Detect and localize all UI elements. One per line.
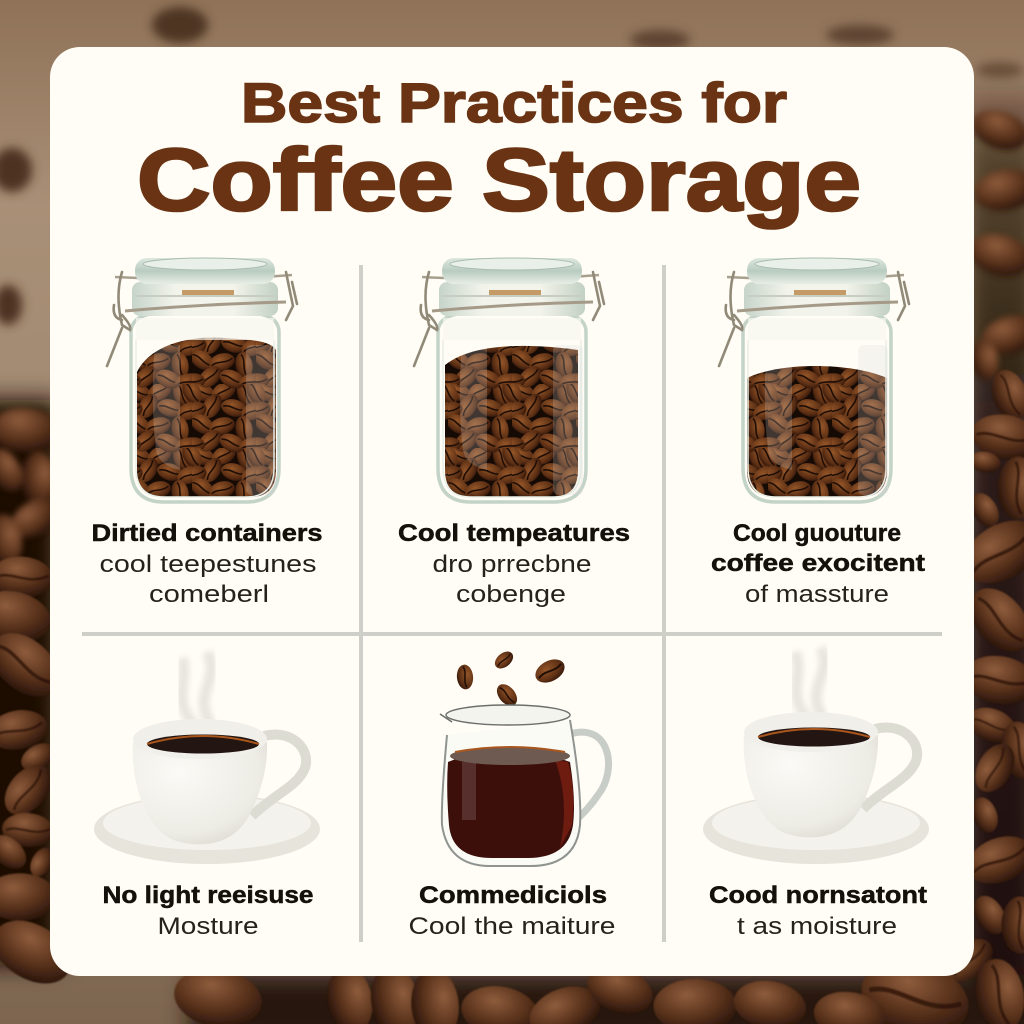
caption: top left [92, 520, 322, 608]
caption: bottom left: Mosture [158, 913, 258, 940]
title: Coffee Storage [137, 130, 861, 229]
caption: top right: Cool guouture [733, 520, 901, 547]
caption: top middle: Cool tempeatures [398, 520, 630, 547]
icon: jar of beans, full [107, 258, 297, 502]
caption: bottom middle: Cool the maiture [408, 913, 616, 940]
icon: jar of beans, lower [719, 258, 909, 502]
title [137, 71, 861, 229]
icon: jar of beans, medium [414, 258, 604, 502]
caption: top right [711, 520, 925, 608]
caption: top left: cool teepestunes [100, 551, 316, 578]
caption: bottom right: t as moisture [737, 913, 897, 940]
caption: top right: coffee exocitent [711, 550, 925, 577]
icon: glass pitcher with beans [440, 648, 609, 866]
caption: top right: of massture [745, 581, 889, 608]
caption: top middle: cobenge [456, 581, 566, 608]
caption: top left: Dirtied containers [92, 520, 322, 547]
caption: top middle [398, 520, 630, 608]
caption: top left: comeberl [149, 581, 269, 608]
caption: bottom middle: Commediciols [419, 882, 607, 909]
icon: cup of coffee with saucer, left [94, 652, 320, 864]
caption: bottom right [709, 882, 927, 940]
caption: bottom left [102, 882, 314, 940]
caption: bottom left: No light reeisuse [102, 882, 314, 909]
caption: bottom right: Cood nornsatont [709, 882, 927, 909]
title: Best Practices for [241, 71, 787, 134]
caption: bottom middle [408, 882, 616, 940]
grid dividers [82, 265, 942, 942]
icon: cup of coffee with saucer, right [703, 648, 929, 864]
caption: top middle: dro prrecbne [432, 551, 592, 578]
